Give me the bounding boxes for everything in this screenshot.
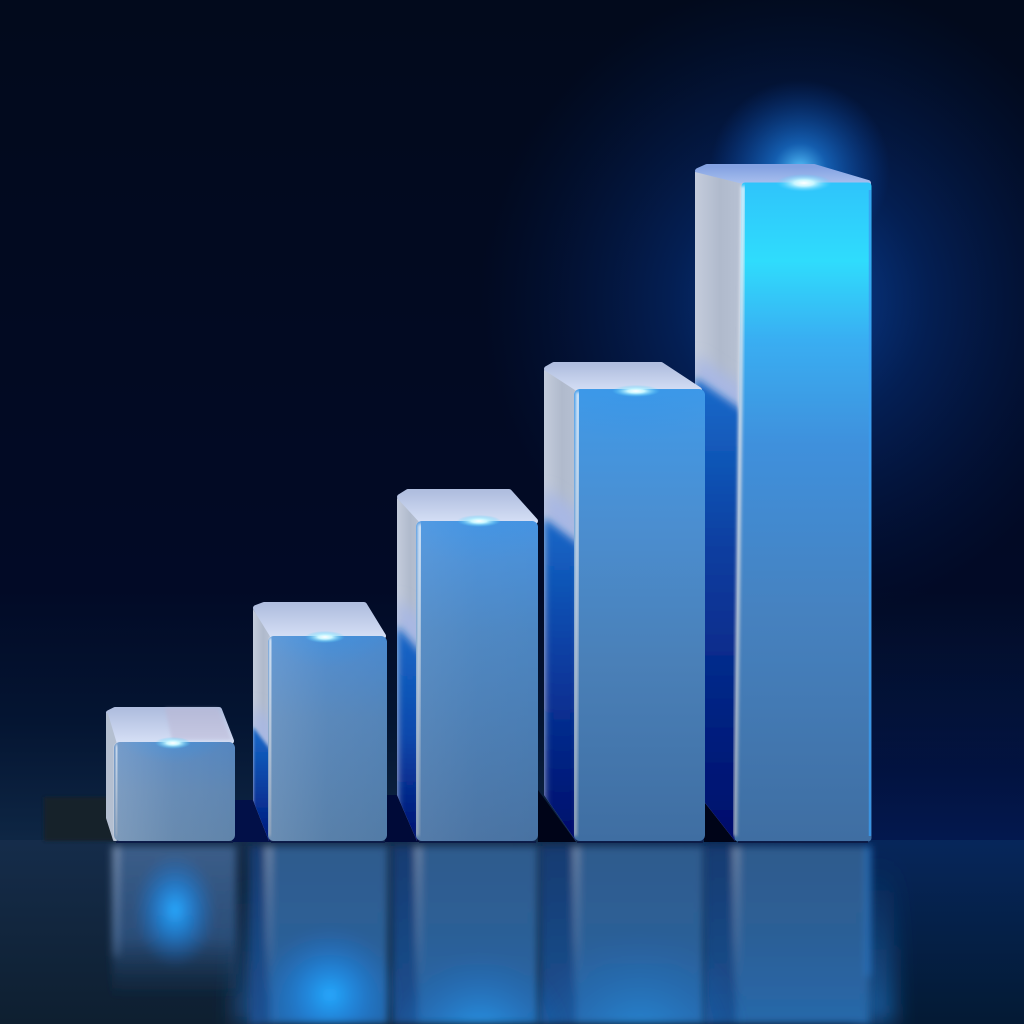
glow above tallest bar	[710, 80, 890, 260]
bar chart	[107, 160, 870, 850]
left side face	[695, 160, 745, 850]
reflection: bar 1	[112, 846, 236, 996]
right edge glow	[869, 190, 871, 836]
reflection: bar 4	[537, 842, 722, 1024]
bottom edge	[271, 841, 385, 843]
highlights on top edges	[155, 174, 832, 749]
floor shadow left of first bar	[44, 797, 116, 841]
bar 4	[544, 362, 705, 843]
bar 1	[107, 701, 235, 842]
front face	[419, 524, 535, 838]
top face	[400, 492, 535, 523]
top edge highlight	[744, 182, 868, 184]
top edge highlight	[272, 635, 384, 637]
top face shaded patch	[165, 708, 232, 740]
reflection: bar 3	[390, 846, 570, 1024]
reflection: bar 2	[250, 846, 400, 1024]
left side face	[253, 609, 270, 841]
left edge highlight	[116, 745, 117, 836]
top face	[109, 710, 231, 743]
bar 2	[253, 602, 387, 843]
top face	[547, 365, 699, 392]
glow under edge	[268, 636, 350, 841]
reflection: bar 5	[704, 846, 871, 1024]
gap shadows between bars	[232, 790, 737, 842]
floor	[0, 840, 1024, 1024]
top edge highlight	[580, 389, 700, 391]
soft spill right of reflections	[860, 860, 894, 1024]
left edge highlight	[417, 524, 420, 836]
top edge highlight	[118, 741, 232, 743]
glow under edge	[113, 742, 209, 841]
front face	[117, 745, 232, 838]
left edge highlight	[575, 392, 578, 836]
top face	[698, 167, 868, 186]
bottom edge	[577, 841, 703, 843]
background glow behind tallest bar	[480, 0, 1024, 620]
left edge highlight	[735, 186, 743, 836]
front face	[577, 392, 702, 838]
glow under edge	[416, 521, 449, 841]
bar 5	[695, 160, 870, 850]
reflections on floor	[112, 846, 894, 1024]
front face	[738, 186, 868, 838]
left side face	[107, 714, 116, 840]
right wall shade	[600, 600, 1024, 840]
left side face	[544, 370, 576, 841]
bottom edge	[116, 841, 233, 843]
bottom edge	[419, 841, 536, 843]
top edge highlight	[422, 520, 536, 522]
glow under edge	[541, 287, 731, 497]
top face	[256, 605, 383, 638]
bar 3	[397, 489, 538, 843]
left side face	[397, 498, 419, 841]
bottom edge	[738, 841, 868, 843]
soft spill left of reflections	[235, 880, 265, 1024]
front face	[271, 639, 384, 838]
left edge highlight	[269, 638, 271, 836]
